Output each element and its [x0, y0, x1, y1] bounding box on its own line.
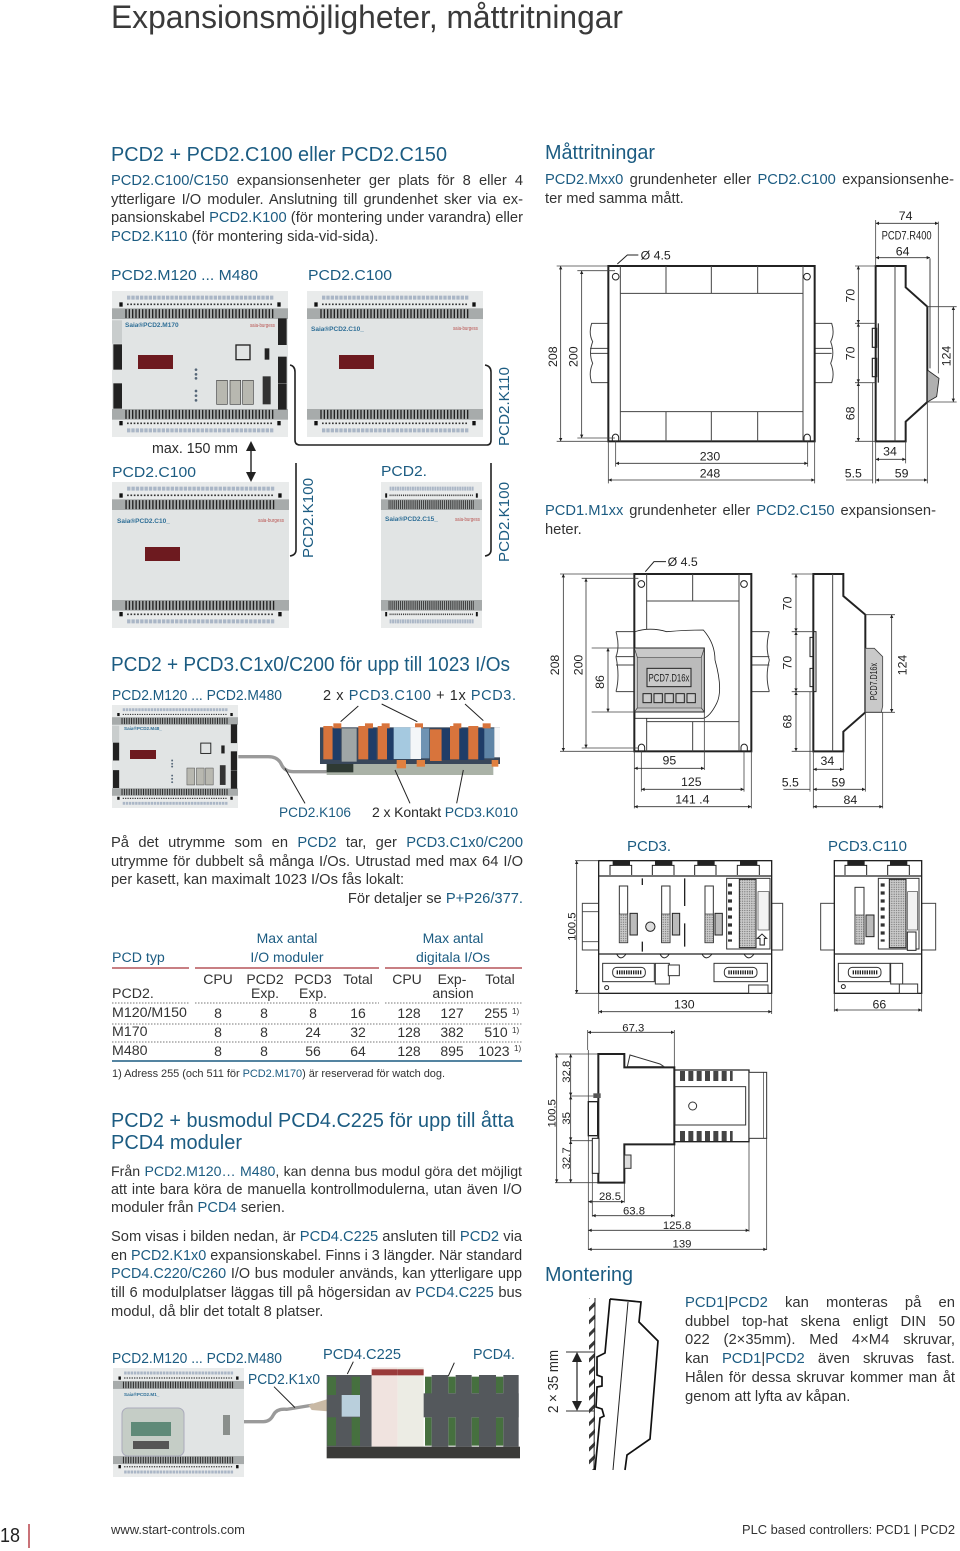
dimension drawing: PCD3 side view: 32.7 [561, 1147, 573, 1169]
table: PCD types: Exp. [251, 985, 279, 1001]
text block: PCD4 para 2: Som visas i bilden nedan, är PCD4.C225 ansluten till PCD2 via [111, 1229, 522, 1245]
text block: mounting [685, 1294, 955, 1410]
table: PCD types: 8 [214, 1024, 222, 1040]
photo: PCD4 rack with cable [244, 1367, 520, 1458]
label: PCD2.K100 right: PCD2.K100 [496, 482, 513, 562]
table: PCD types: 56 [305, 1043, 321, 1059]
dimension drawing: PCD2.Mxx0: 208 [546, 346, 560, 367]
text block: mounting: kan PCD1|PCD2 även skruvas fast. [685, 1351, 955, 1367]
text block: PCD4 para 1: Från PCD2.M120… M480, kan denna bus modul göra det möjligt [111, 1163, 522, 1179]
photo: PCD2.C10 unit top right [307, 291, 483, 437]
text block: mounting: Hålen för dessa skruvar kommer man åt [685, 1370, 955, 1386]
dimension drawing: PCD1.M1xx: 34 [820, 754, 834, 768]
dimension drawing: PCD1.M1xx: 124 [896, 655, 910, 675]
label: 2 x Kontakt PCD3.K010: 2 x Kontakt PCD3.K010 [372, 804, 518, 820]
table: PCD types: 895 [440, 1043, 464, 1059]
footer url: www.start-controls.com [110, 1522, 245, 1537]
text block: expansion intro [111, 172, 523, 248]
heading: Måttritningar: Måttritningar [545, 142, 655, 164]
dimension drawing: PCD1.M1xx: 5.5 [782, 776, 799, 790]
text block: PCD3 description: För detaljer se P+P26/377. [348, 891, 523, 907]
table: PCD types: 1) Adress 255 (och 511 för PCD2.M170) är reserverad för watch dog. [112, 1068, 445, 1080]
table: PCD types: Max antal [257, 930, 317, 946]
table: PCD types: PCD3 [294, 971, 332, 987]
footer [0, 1522, 955, 1548]
dimension drawing: PCD1.M1xx: PCD7.D16x [869, 663, 880, 700]
dimension drawing: PCD2.Mxx0: 248 [700, 466, 720, 480]
photo: PCD2.C15 unit: saia-burgess [455, 517, 480, 523]
text block: PCD2.Mxx0 dimensions: ter med samma mått. [545, 191, 684, 207]
dimension drawing: PCD1.M1xx: 70 [781, 596, 795, 610]
photo: PCD2.C10 unit lower left: Saia®PCD2.C10_ [117, 517, 170, 525]
table: PCD types: M170 [112, 1024, 148, 1040]
section: PCD4 bus module [111, 1110, 522, 1477]
table: PCD types: 1) [512, 1007, 519, 1016]
table: PCD types: 510 [484, 1024, 508, 1040]
table: PCD types: 128 [397, 1024, 421, 1040]
text block: PCD3 description: per kasett, kan maximalt 1023 I/Os fås lokalt: [111, 872, 404, 888]
photo: PCD2.C15 unit: Saia®PCD2.C15_ [385, 515, 438, 523]
label: max 150 mm: max. 150 mm [152, 440, 238, 457]
table: PCD types: 1) [512, 1026, 519, 1035]
dimension drawing: PCD2.Mxx0: 74 [899, 209, 913, 223]
dimension drawing: PCD1.M1xx: 208 [548, 655, 562, 675]
text block: PCD3 description: utrymme för dubbelt så många I/Os. Utrustad med max 64 I/O [111, 854, 523, 870]
photo: PCD2.M1 unit: Saia®PCD2.M1_ [124, 1391, 160, 1397]
text block: expansion intro: ytterligare I/O moduler. Anslutning till grundenhet sker via ex- [111, 192, 523, 208]
text block: PCD1.M1xx dimensions: PCD1.M1xx grundenheter eller PCD2.C150 expansionsen- [545, 503, 936, 519]
text block: expansion intro: PCD2.K110 (för montering sida-vid-sida). [111, 229, 378, 245]
table: PCD types: 127 [440, 1005, 464, 1021]
text block: PCD2.Mxx0 dimensions [545, 171, 954, 211]
dimension drawing: PCD1.M1xx: 84 [843, 793, 857, 807]
dimension drawing: PCD3 side view: 100.5 [547, 1099, 559, 1128]
text block: PCD4 para 2: modul, då blir det totalt 8 platser. [111, 1304, 323, 1320]
dimension drawing: PCD1.M1xx: Ø 4.5 [668, 555, 698, 569]
dimension drawing: PCD3 racks [567, 861, 936, 1050]
text block: PCD3 description: På det utrymme som en PCD2 tar, ger PCD3.C1x0/C200 [111, 835, 523, 851]
text block: PCD4 para 2: till 6 modulplatser läggas till på högersidan av PCD4.C225 bus [111, 1285, 522, 1301]
table: PCD types: PCD2. [112, 986, 154, 1002]
dimension drawing: PCD1.M1xx: 141 .4 [675, 792, 710, 806]
table: PCD types: Total [343, 971, 373, 987]
dimension drawing: PCD2.Mxx0: 5.5 [845, 466, 862, 480]
photo: PCD2.M170 unit: Saia®PCD2.M170 [125, 321, 179, 329]
dimension drawing: PCD1.M1xx: 70 [781, 656, 795, 670]
table: PCD types: 32 [350, 1024, 366, 1040]
text block: mounting: PCD1|PCD2 kan monteras på en [685, 1295, 955, 1311]
label: PCD2.M120 ... PCD2.M480 bottom: PCD2.M120 ... PCD2.M480 [112, 1351, 282, 1367]
dimension drawing: PCD2.Mxx0: 124 [940, 346, 954, 366]
dimension drawing: PCD3 racks: 67.3 [622, 1022, 644, 1034]
table: PCD types: Exp- [438, 971, 467, 987]
dimension drawing: PCD2.Mxx0: 68 [843, 406, 857, 420]
dimension drawing: PCD1.M1xx: 95 [662, 754, 676, 768]
label: PCD2.K110: PCD2.K110 [496, 367, 513, 446]
table: PCD types: 64 [350, 1043, 366, 1059]
dimension drawing: PCD2.Mxx0: PCD7.R400 [882, 228, 932, 242]
label: PCD2.K100 left: PCD2.K100 [300, 478, 317, 558]
heading: PCD2 + busmodul [111, 1110, 515, 1154]
photo: PCD2.C10 unit top right: saia-burgess [453, 326, 478, 332]
table: PCD types: 8 [214, 1005, 222, 1021]
photo: PCD2.C10 unit top right: Saia®PCD2.C10_ [311, 325, 364, 333]
text block: PCD1.M1xx dimensions [545, 502, 936, 542]
dimension drawing: PCD3 side view: 125.8 [663, 1220, 691, 1232]
photo: PCD2.M170 unit: saia-burgess [250, 323, 275, 329]
dimension drawing: PCD3 side view [547, 1050, 767, 1250]
table: PCD types: Max antal [423, 930, 483, 946]
table: PCD types: 24 [305, 1024, 321, 1040]
table: PCD types: 8 [214, 1043, 222, 1059]
table: PCD types: 128 [397, 1043, 421, 1059]
dimension drawing: PCD1.M1xx: 59 [831, 776, 845, 790]
cable: PCD2.K110 [290, 365, 491, 445]
photo: PCD2.C10 unit lower left [112, 482, 289, 628]
table: PCD types: 128 [397, 1005, 421, 1021]
dimension drawing: PCD1.M1xx: 200 [571, 655, 585, 675]
text block: mounting: dubbel top-hat skena enligt DIN 50 [685, 1314, 955, 1330]
table: PCD types [112, 930, 522, 1080]
label: PCD2.M120 ... M480: PCD2.M120 ... M480 [111, 267, 258, 284]
dimension drawing: PCD2.Mxx0: 230 [700, 450, 720, 464]
text block: PCD4 para 1 [111, 1162, 522, 1222]
dimension drawing: PCD1.M1xx [548, 555, 910, 808]
table: PCD types: I/O moduler [250, 949, 324, 965]
table: PCD types: CPU [392, 971, 422, 987]
table: PCD types: Total [485, 971, 515, 987]
label: PCD2.K106: PCD2.K106 [279, 804, 351, 820]
label: PCD3.C110: PCD3.C110 [828, 838, 907, 855]
table: PCD types: 1023 [478, 1043, 510, 1059]
photo: PCD2.C15 unit [381, 482, 482, 628]
dimension drawing: PCD2.Mxx0: 200 [567, 346, 581, 367]
label: PCD2.C100 top: PCD2.C100 [308, 267, 392, 284]
label: 2 x PCD3.C100 + 1x PCD3.: 2 x PCD3.C100 + 1x PCD3. [323, 688, 516, 704]
label: PCD2.C100 lower: PCD2.C100 [112, 464, 196, 481]
heading: PCD2 + PCD3: PCD2 + PCD3.C1x0/C200 för upp till 1023 I/Os [111, 654, 510, 676]
text block: PCD2.Mxx0 dimensions: PCD2.Mxx0 grundenheter eller PCD2.C100 expansionsenhe- [545, 172, 954, 188]
table: PCD types: 1) [514, 1044, 521, 1053]
dimension drawing: PCD2.Mxx0 [546, 209, 957, 483]
heading: Montering: Montering [545, 1264, 633, 1286]
section: PCD2 + PCD2.C100 eller PCD2.C150 [111, 144, 523, 284]
heading: PCD2 + busmodul: PCD2 + busmodul PCD4.C225 för upp till åtta [111, 1110, 515, 1132]
label: PCD2.K1x0: PCD2.K1x0 [248, 1372, 320, 1388]
table: PCD types: ansion [432, 985, 474, 1001]
table: PCD types: M120/M150 [112, 1005, 187, 1021]
table: PCD types: 8 [309, 1005, 317, 1021]
table: PCD types: CPU [203, 971, 233, 987]
label: PCD2.M120 ... PCD2.M480: PCD2.M120 ... PCD2.M480 [112, 688, 282, 704]
cable: PCD2.K100 right [485, 463, 491, 556]
table: PCD types: PCD2 [246, 971, 284, 987]
text block: mounting: 022 (2×35mm). Med 4×M4 skruvar, [685, 1332, 955, 1348]
dimension drawing: PCD1.M1xx: 86 [593, 675, 607, 689]
text block: PCD4 para 2: PCD4.C220/C260 I/O bus moduler används, kan ytterligare upp [111, 1266, 522, 1282]
table: PCD types: 8 [260, 1043, 268, 1059]
dimension drawing: PCD2.Mxx0: 59 [895, 466, 909, 480]
dimension drawing: PCD3 side view: 63.8 [623, 1206, 645, 1218]
arrow: 150 mm [246, 441, 256, 482]
text block: PCD4 para 2: en PCD2.K1x0 expansionskabel. Finns i 3 längder. När standard [111, 1248, 522, 1264]
photo: PCD2.M480 unit [112, 705, 238, 808]
dimension drawing: PCD3 side view: 28.5 [599, 1191, 621, 1203]
dimension drawing: PCD3 side view: 32.8 [561, 1061, 573, 1083]
label: PCD2.: PCD2. [381, 463, 427, 480]
label: PCD3.: PCD3. [627, 838, 671, 855]
photo: PCD2.M170 unit [112, 291, 288, 437]
table: PCD types: 382 [440, 1024, 464, 1040]
page number: 18 [0, 1525, 20, 1547]
text block: expansion intro: PCD2.C100/C150 expansionsenheter ger plats för 8 eller 4 [111, 173, 523, 189]
label: PCD4.: PCD4. [473, 1347, 515, 1363]
table: PCD types: 8 [260, 1024, 268, 1040]
table: PCD types: Exp. [299, 985, 327, 1001]
cable: PCD2.K100 left [290, 463, 296, 556]
diagram: mounting side view [545, 1298, 658, 1470]
dimension drawing: PCD1.M1xx: 68 [781, 715, 795, 729]
text block: expansion intro: pansionskabel PCD2.K100 (för montering under varandra) eller [111, 210, 523, 226]
text block: PCD4 para 2 [111, 1228, 522, 1326]
photo: PCD2.M480 unit: Saia®PCD2.M48_ [124, 725, 162, 731]
heading: PCD2 + busmodul: PCD4 moduler [111, 1132, 242, 1154]
footer title: PLC based controllers: PCD1 | PCD2 [742, 1522, 955, 1537]
text block: PCD1.M1xx dimensions: heter. [545, 522, 582, 538]
section: PCD2 + PCD3 [111, 654, 523, 912]
dimension drawing: PCD1.M1xx: 125 [681, 775, 702, 789]
table: PCD types: M480 [112, 1043, 148, 1059]
dimension drawing: PCD3 racks: 66 [872, 998, 886, 1012]
dimension drawing: PCD3 racks: 130 [674, 998, 695, 1012]
dimension drawing: PCD2.Mxx0: Ø 4.5 [641, 248, 671, 262]
dimension drawing: PCD3 side view: 35 [561, 1112, 573, 1125]
dimension drawing: PCD2.Mxx0: 70 [843, 346, 857, 360]
table: PCD types: digitala I/Os [416, 949, 490, 965]
leader lines: PCD4 [274, 1362, 454, 1408]
photo: PCD2.C10 unit lower left: saia-burgess [258, 518, 284, 524]
photo: PCD3 rack with cable [238, 723, 500, 775]
diagram: mounting side view: 2 × 35 mm [545, 1350, 562, 1413]
dimension drawing: PCD3 side view: 139 [673, 1238, 691, 1250]
text block: mounting: genom att lyfta av kåpan. [685, 1389, 850, 1405]
dimension drawing: PCD2.Mxx0: 64 [896, 244, 910, 258]
leader lines: PCD3 [285, 704, 483, 803]
table: PCD types: 8 [260, 1005, 268, 1021]
heading: PCD2 + PCD2.C100: PCD2 + PCD2.C100 eller PCD2.C150 [111, 144, 447, 166]
dimension drawing: PCD2.Mxx0: 70 [843, 289, 857, 303]
dimension drawing: PCD1.M1xx: PCD7.D16x [649, 673, 690, 685]
dimension drawing: PCD2.Mxx0: 34 [883, 444, 897, 458]
text block: PCD4 para 1: att inte bara köra de manuella kontrollmodulerna, utan även I/O [111, 1182, 522, 1198]
label: PCD4.C225: PCD4.C225 [323, 1347, 401, 1363]
dimension drawing: PCD3 racks: 100.5 [567, 912, 579, 941]
table: PCD types: 16 [350, 1005, 366, 1021]
table: PCD types: 255 [484, 1005, 508, 1021]
photo: PCD2.M1 unit [113, 1368, 244, 1477]
text block: PCD4 para 1: moduler från PCD4 serien. [111, 1200, 285, 1216]
table: PCD types: PCD typ [112, 950, 165, 966]
text block: PCD3 description [111, 834, 523, 912]
title: Expansionsmöjligheter, måttritningar [111, 0, 623, 35]
